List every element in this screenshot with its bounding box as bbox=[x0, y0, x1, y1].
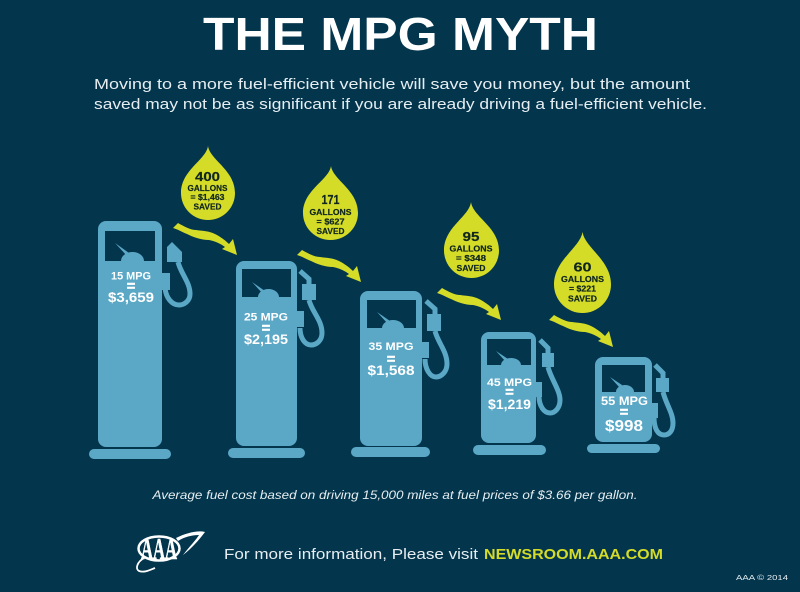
drop 95 gallons: 95 bbox=[462, 229, 480, 244]
arrow 3 bbox=[437, 288, 501, 320]
arrow 2 bbox=[297, 250, 361, 282]
pump 55 MPG: = bbox=[620, 404, 629, 421]
copyright: AAA © 2014 bbox=[736, 573, 788, 582]
pump 15 MPG: = bbox=[127, 278, 136, 295]
drop 400 gallons: SAVED bbox=[194, 202, 222, 212]
pump 55 MPG bbox=[587, 357, 673, 453]
title: THE MPG MYTH bbox=[203, 8, 598, 60]
pump 15 MPG: 15 MPG bbox=[111, 270, 151, 282]
call to action: For more information, Please visit bbox=[224, 546, 479, 563]
arrow 1 bbox=[173, 223, 237, 255]
pump 25 MPG: 25 MPG bbox=[244, 312, 288, 324]
drop 171 gallons: 171 bbox=[322, 192, 340, 207]
drop 60 gallons: = $221 bbox=[569, 284, 596, 294]
drop 400 gallons: GALLONS bbox=[188, 183, 228, 193]
drop 95 gallons: SAVED bbox=[456, 263, 486, 273]
drop 400 gallons: 400 bbox=[195, 169, 220, 184]
pump 45 MPG: $1,219 bbox=[488, 396, 531, 412]
drop 400 gallons bbox=[181, 146, 235, 220]
pump 15 MPG: $3,659 bbox=[108, 289, 154, 305]
intro text: Moving to a more fuel-efficient vehicle will save you money, but the amount bbox=[94, 76, 691, 93]
drop 95 gallons bbox=[444, 202, 499, 278]
drop 171 gallons: SAVED bbox=[316, 226, 344, 236]
arrow 4 bbox=[549, 315, 613, 347]
pump 55 MPG: 55 MPG bbox=[601, 394, 648, 408]
pump 55 MPG: $998 bbox=[605, 418, 643, 435]
pump 35 MPG bbox=[351, 291, 447, 457]
call to action bbox=[224, 546, 663, 563]
call to action: NEWSROOM.AAA.COM bbox=[484, 546, 663, 563]
drop 400 gallons: = $1,463 bbox=[190, 192, 225, 202]
pump 25 MPG: $2,195 bbox=[244, 331, 288, 347]
pump 25 MPG bbox=[228, 261, 322, 458]
pump 45 MPG: = bbox=[505, 384, 514, 401]
intro text: saved may not be as significant if you are already driving a fuel-efficient vehicle. bbox=[94, 96, 707, 113]
drop 60 gallons bbox=[554, 232, 611, 313]
pump 25 MPG: = bbox=[262, 320, 271, 337]
drop 95 gallons: GALLONS bbox=[450, 244, 493, 254]
drop 95 gallons: = $348 bbox=[456, 253, 486, 263]
icon: AAA logo: AAA bbox=[141, 531, 177, 566]
pump 45 MPG: 45 MPG bbox=[487, 377, 532, 389]
pump 35 MPG: 35 MPG bbox=[368, 341, 414, 353]
pump 15 MPG bbox=[89, 221, 190, 459]
drop 171 gallons: GALLONS bbox=[310, 207, 352, 217]
pump 45 MPG bbox=[473, 332, 560, 455]
pump 35 MPG: $1,568 bbox=[368, 362, 415, 378]
drop 60 gallons: 60 bbox=[574, 260, 592, 274]
drop 60 gallons: SAVED bbox=[568, 294, 597, 304]
footnote: Average fuel cost based on driving 15,000 miles at fuel prices of $3.66 per gallon. bbox=[151, 490, 638, 502]
pump 35 MPG: = bbox=[387, 351, 396, 368]
intro text bbox=[94, 76, 707, 113]
drop 60 gallons: GALLONS bbox=[561, 274, 604, 284]
drop 171 gallons bbox=[303, 166, 358, 240]
drop 171 gallons: = $627 bbox=[316, 216, 345, 226]
